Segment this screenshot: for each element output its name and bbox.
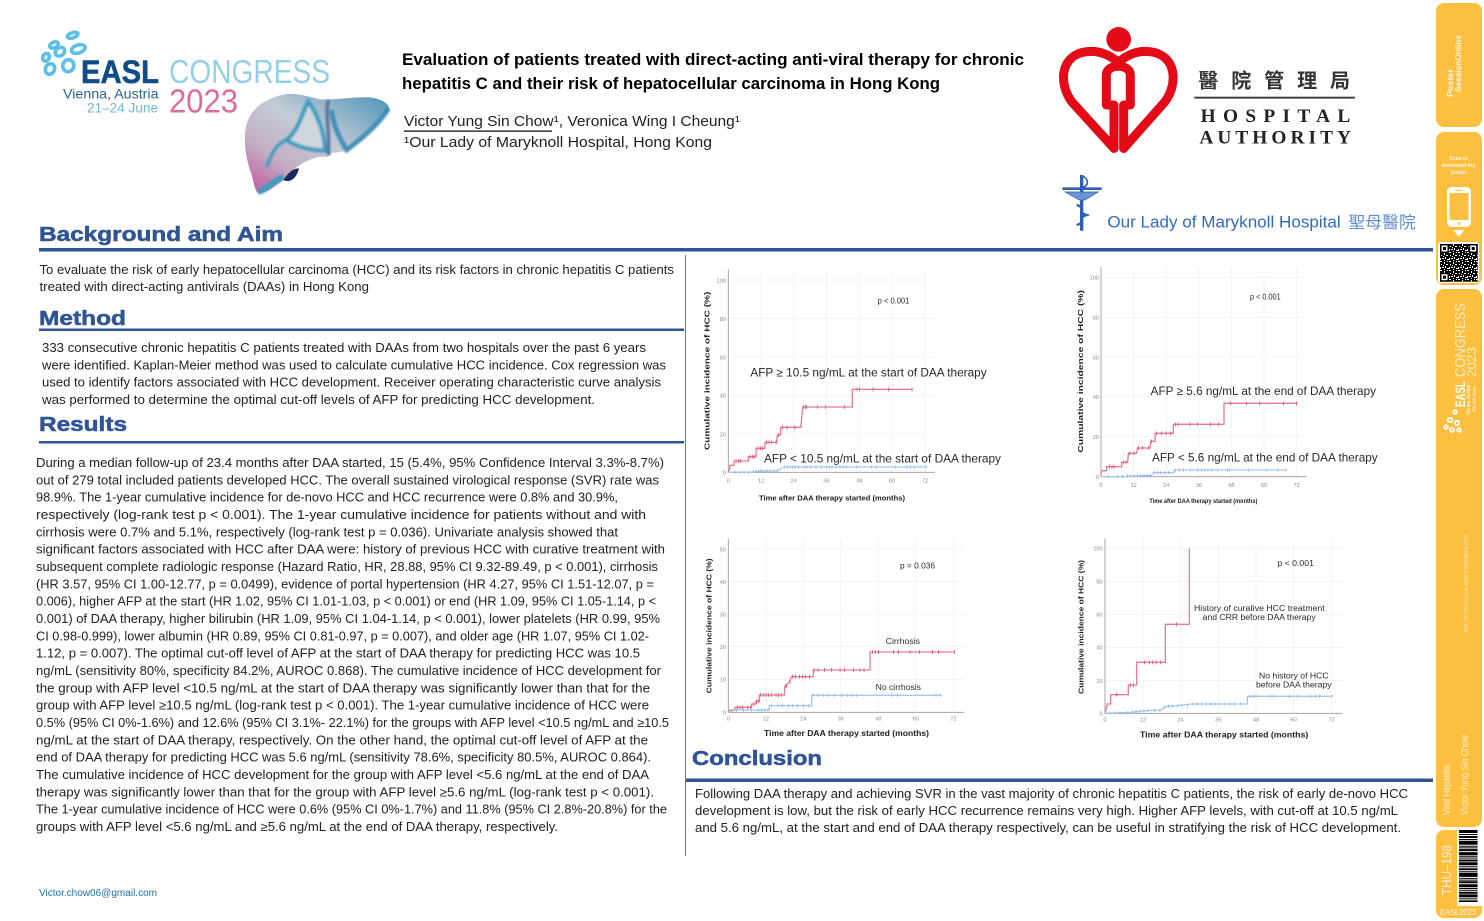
text: results: end of DAA therapy for predicting HCC was 5.6 ng/mL (sensitivity 78.6%, specificity 80.5%, AUROC 0.864). xyxy=(36,751,651,765)
text: results: ng/mL (sensitivity 80%, specificity 84.2%, AUROC 0.868). The cumulative incidence of HCC development for xyxy=(36,664,661,678)
title: Evaluation of patients treated with direct-acting anti-viral therapy for chronic xyxy=(402,51,1024,69)
y axis title: Cumulative incidence of HCC (%) xyxy=(1077,560,1086,694)
chart: cirrhosis: 30 xyxy=(720,612,726,618)
chart: AFP at the start of DAA therapy: 0 xyxy=(723,471,726,477)
chart: history of curative HCC treatment: 48 xyxy=(1253,718,1259,724)
text: results: the group with AFP level <10.5 ng/mL at the start of DAA therapy was significantly lower than that for the xyxy=(36,681,650,695)
chart: cirrhosis: 0 xyxy=(723,711,726,717)
rotated EASL congress logo xyxy=(1444,303,1479,432)
DOI: DOI: 10.3252/pson.eu.EASLCONGRESS.2023 xyxy=(1464,535,1470,632)
rotated EASL congress logo: 2023 xyxy=(1464,347,1479,377)
chart: cirrhosis: 10 xyxy=(720,678,726,684)
p value: p < 0.001 xyxy=(878,296,910,305)
y axis title: Cumulative incidence of HCC (%) xyxy=(703,291,712,450)
text: aim: treated with direct-acting antivirals (DAAs) in Hong Kong xyxy=(40,280,369,294)
chart: history of curative HCC treatment: 20 xyxy=(1096,679,1103,685)
chart: cirrhosis: 60 xyxy=(913,717,919,723)
icon: down arrow xyxy=(1453,230,1464,237)
sidebar: poster number and barcode xyxy=(1436,830,1482,918)
curve: low AFP xyxy=(728,467,927,472)
rotated EASL congress logo: CONGRESS xyxy=(1452,303,1469,377)
chart: AFP at the end of DAA therapy: 20 xyxy=(1093,435,1099,441)
text: conclusion: development is low, but the risk of early HCC recurrence remains very high. Higher AFP levels, with cut-off at 10.5 ng/mL xyxy=(695,804,1398,818)
annotation: cirrhosis: Cirrhosis xyxy=(886,637,920,646)
annotation: chart 1 labels xyxy=(750,296,1001,466)
poster number: THU–198 xyxy=(1439,845,1454,895)
chart: cirrhosis: 12 xyxy=(763,717,769,723)
curve: cirrhosis xyxy=(728,652,954,712)
annotation: high AFP: AFP ≥ 10.5 ng/mL at the start of DAA therapy xyxy=(750,367,987,380)
chart: cirrhosis: 0 xyxy=(727,717,730,723)
chart: history of curative HCC treatment: 60 xyxy=(1291,718,1297,724)
curve: low AFP xyxy=(1101,470,1286,477)
CONGRESS wordmark: CONGRESS xyxy=(169,53,330,90)
annotation: no history of HCC xyxy=(1256,671,1332,689)
panel: conclusion xyxy=(686,747,1433,835)
chart: AFP at the end of DAA therapy: 72 xyxy=(1294,483,1300,489)
chart: AFP at the start of DAA therapy: 0 xyxy=(727,478,730,484)
chart: cirrhosis: 24 xyxy=(800,717,806,723)
chart: AFP at the start of DAA therapy: 36 xyxy=(823,478,829,484)
text: results xyxy=(36,456,669,834)
x axis title: Time after DAA therapy started (months) xyxy=(764,729,929,738)
text: results: therapy was significantly lower than that for the group with AFP level ≥5.6 ng/mL (log-rank test p < 0.001). xyxy=(36,785,654,799)
chart: AFP at the start of DAA therapy: 60 xyxy=(720,355,726,361)
heading: background and aim: Background and Aim xyxy=(39,223,283,246)
icon: caduceus xyxy=(1062,175,1102,231)
chart: history of curative HCC treatment: 24 xyxy=(1178,718,1184,724)
chart: cirrhosis: 48 xyxy=(875,717,881,723)
annotation: chart 4 labels xyxy=(1194,559,1332,689)
chart: AFP at the end of DAA therapy xyxy=(1076,267,1306,505)
logo: Hospital Authority xyxy=(1064,27,1355,149)
text: aim: To evaluate the risk of early hepatocellular carcinoma (HCC) and its risk factors in chronic hepatitis C patients xyxy=(40,263,674,277)
text: method: was performed to determine the optimal cut-off levels of AFP for predicting HCC development. xyxy=(41,393,595,407)
rotated EASL congress logo: EASL xyxy=(1452,381,1468,407)
chart: AFP at the end of DAA therapy: 60 xyxy=(1093,355,1099,361)
logo: EASL Congress 2023 xyxy=(41,31,389,193)
logo: Hospital Authority: AUTHORITY xyxy=(1199,128,1351,149)
QR code xyxy=(1438,242,1479,283)
icon: red heart and person xyxy=(1064,27,1173,148)
text: results: cirrhosis were 0.7% and 5.1%, respectively (log-rank test p = 0.036). Univariate analysis showed that xyxy=(36,525,619,539)
text: aim xyxy=(40,263,674,294)
text: results: 0.5% (95% CI 0%-1.6%) and 12.6% (95% CI 3.1%- 22.1%) for the groups with AFP level <10.5 ng/mL and ≥10.5 xyxy=(36,716,669,730)
panel: results xyxy=(36,413,684,834)
text: method: were identified. Kaplan-Meier method was used to calculate cumulative HCC incidence. Cox regression was xyxy=(41,358,666,372)
chart: history of curative HCC treatment: 100 xyxy=(1093,547,1103,553)
chart: AFP at the start of DAA therapy: 24 xyxy=(791,478,797,484)
text: results: out of 279 total included patients developed HCC. The overall sustained virological response (SVR) rate was xyxy=(36,473,659,487)
title: hepatitis C and their risk of hepatocellular carcinoma in Hong Kong xyxy=(402,75,940,93)
annotation: chart 3 labels xyxy=(876,561,936,692)
sidebar: scan to download xyxy=(1436,132,1482,285)
annotation: low AFP: AFP < 5.6 ng/mL at the end of DAA therapy xyxy=(1152,452,1378,465)
location: Vienna, Austria xyxy=(63,86,159,102)
p value: p < 0.001 xyxy=(1250,292,1281,301)
y axis title: Cumulative incidence of HCC (%) xyxy=(1076,289,1085,453)
Chinese name: 醫院管理局 xyxy=(1198,64,1350,93)
chart: AFP at the start of DAA therapy: 60 xyxy=(889,478,895,484)
text: results: subsequent complete radiologic response (Hazard Ratio, HR, 28.88, 95% CI 9.32-89.49, p < 0.001), cirrhosis xyxy=(36,560,658,574)
p value: p < 0.001 xyxy=(1277,559,1315,568)
annotation: history of HCC xyxy=(1194,604,1326,622)
topic: Viral Hepatitis xyxy=(1442,765,1453,815)
presenter: Victor Yung Sin Chow xyxy=(1460,734,1471,815)
scan caption: Scan to xyxy=(1449,156,1468,162)
dates: 21–24 June xyxy=(87,100,158,116)
annotation: chart 2 labels xyxy=(1151,292,1378,465)
title xyxy=(402,51,1024,93)
scan caption: poster xyxy=(1451,170,1466,176)
text: method xyxy=(41,341,666,407)
chart: cirrhosis xyxy=(704,538,964,738)
chart: history of curative HCC treatment: 60 xyxy=(1096,613,1103,619)
annotation: no history of HCC: before DAA therapy xyxy=(1256,680,1332,689)
contact email: Victor.chow06@gmail.com xyxy=(39,888,157,899)
chart: history of curative HCC treatment: 0 xyxy=(1103,718,1107,724)
text: results: groups with AFP level <5.6 ng/mL and ≥5.6 ng/mL at the end of DAA therapy, respectively. xyxy=(36,820,558,834)
chart: AFP at the end of DAA therapy: 12 xyxy=(1131,483,1137,489)
text: method: 333 consecutive chronic hepatitis C patients treated with DAAs from two hospitals over the past 6 years xyxy=(42,341,646,355)
icon: phone xyxy=(1447,187,1471,227)
authors and affiliation xyxy=(404,114,740,151)
chart: AFP at the end of DAA therapy: 40 xyxy=(1093,395,1099,401)
chart: AFP at the start of DAA therapy: 40 xyxy=(720,394,726,400)
sidebar: congress and session details xyxy=(1436,289,1482,827)
curve: history of HCC xyxy=(1105,548,1189,713)
chart: cirrhosis: 40 xyxy=(720,580,726,586)
chart: cirrhosis: 20 xyxy=(720,645,726,651)
authors and affiliation: Victor Yung Sin Chow¹, Veronica Wing I Cheung¹ xyxy=(404,114,740,130)
EASL wordmark: EASL xyxy=(81,54,159,90)
p value: p = 0.036 xyxy=(900,561,936,570)
logo: Our Lady of Maryknoll Hospital xyxy=(1062,175,1416,233)
heading: conclusion: Conclusion xyxy=(692,747,822,770)
chart: cirrhosis: 50 xyxy=(720,547,726,553)
chart: AFP at the end of DAA therapy: 48 xyxy=(1228,483,1234,489)
chart: AFP at the start of DAA therapy: 48 xyxy=(856,478,862,484)
text: results: The cumulative incidence of HCC development for the group with AFP level <5.6 ng/mL at the end of DAA xyxy=(36,768,650,782)
chart: history of curative HCC treatment: 0 xyxy=(1100,712,1103,718)
chart: AFP at the end of DAA therapy: 36 xyxy=(1196,483,1202,489)
text: conclusion: and 5.6 ng/mL, at the start and end of DAA therapy respectively, can be useful in stratifying the risk of HCC development. xyxy=(695,821,1401,835)
x axis title: Time after DAA therapy started (months) xyxy=(1149,498,1257,505)
authors and affiliation: ¹Our Lady of Maryknoll Hospital, Hong Kong xyxy=(404,135,712,151)
chart: AFP at the end of DAA therapy: 100 xyxy=(1090,276,1099,282)
chart: cirrhosis: 36 xyxy=(838,717,844,723)
brand text: Poster xyxy=(1446,69,1455,97)
text: results: CI 0.98-0.999), lower albumin (HR 0.89, 95% CI 0.81-0.97, p = 0.007), and older age (HR 1.07, 95% CI 1.02- xyxy=(36,629,649,643)
heading: method: Method xyxy=(39,307,126,330)
chart: AFP at the end of DAA therapy: 80 xyxy=(1093,316,1099,322)
heading: results: Results xyxy=(39,413,127,436)
chart: history of curative HCC treatment: 36 xyxy=(1215,718,1221,724)
scan caption xyxy=(1442,156,1475,176)
curve: no cirrhosis xyxy=(728,695,942,712)
chart: cirrhosis: 72 xyxy=(950,717,956,723)
chart: AFP at the end of DAA therapy: 0 xyxy=(1096,475,1099,481)
icon: liver xyxy=(245,94,389,193)
annotation: history of HCC: History of curative HCC treatment xyxy=(1194,604,1326,613)
text: results: 0.001) of DAA therapy, higher bilirubin (HR 1.09, 95% CI 1.04-1.14, p < 0.001), lower platelets (HR 0.99, 95% xyxy=(36,612,660,626)
barcode xyxy=(1459,830,1478,902)
annotation: low AFP: AFP < 10.5 ng/mL at the start of DAA therapy xyxy=(764,453,1001,466)
text: results: (HR 3.57, 95% CI 1.00-12.77, p = 0.0499), evidence of portal hypertension (HR 4.27, 95% CI 1.51-12.07, p = xyxy=(36,577,654,591)
x axis title: Time after DAA therapy started (months) xyxy=(1140,730,1309,739)
icon: EASL hexagon cluster xyxy=(41,31,86,76)
chart: AFP at the end of DAA therapy: 60 xyxy=(1261,483,1267,489)
chart: AFP at the end of DAA therapy: 0 xyxy=(1099,483,1103,489)
text: results: respectively (log-rank test p < 0.001). The 1-year cumulative incidence for patients without and with xyxy=(36,508,646,522)
text: results: group with AFP level ≥10.5 ng/mL (log-rank test p < 0.001). The 1-year cumulative incidence of HCC were xyxy=(36,699,649,713)
x axis title: Time after DAA therapy started (months) xyxy=(759,494,905,503)
hospital name: Our Lady of Maryknoll Hospital xyxy=(1107,213,1341,231)
rotated EASL congress logo: Vienna, Austria xyxy=(1466,384,1472,415)
annotation: no cirrhosis: No cirrhosis xyxy=(876,683,921,692)
y axis title: Cumulative incidence of HCC (%) xyxy=(704,558,713,693)
text: results: 0.006), higher AFP at the start (HR 1.02, 95% CI 1.01-1.03, p < 0.001) or end (HR 1.09, 95% CI 1.05-1.14, p < xyxy=(36,595,656,609)
text: results: The 1-year cumulative incidence of HCC were 0.6% (95% CI 0%-1.7%) and 11.8% (95% CI 2.8%-20.8%) for the xyxy=(36,803,667,817)
chart: AFP at the start of DAA therapy: 12 xyxy=(758,478,764,484)
curve: high AFP xyxy=(1101,403,1297,477)
annotation: history of HCC: and CRR before DAA therapy xyxy=(1203,613,1316,622)
text: conclusion: Following DAA therapy and achieving SVR in the vast majority of chronic hepatitis C patients, the risk of early de-novo HCC xyxy=(695,787,1408,801)
chart: history of curative HCC treatment: 80 xyxy=(1096,580,1103,586)
text: results: ng/mL at the start of DAA therapy, respectively. On the other hand, the optimal cut-off level of AFP at the xyxy=(36,733,648,747)
curve: high AFP xyxy=(728,389,913,472)
sidebar: poster session online xyxy=(1436,3,1482,127)
chart: history of curative HCC treatment xyxy=(1077,538,1343,739)
year: 2023 xyxy=(169,82,238,120)
chart: AFP at the start of DAA therapy: 100 xyxy=(717,278,726,284)
chart: history of curative HCC treatment: 12 xyxy=(1140,718,1146,724)
rotated EASL congress logo: 21–24 June xyxy=(1472,386,1478,412)
brand text xyxy=(1446,34,1463,97)
chart: history of curative HCC treatment: 72 xyxy=(1329,718,1335,724)
text: results: During a median follow-up of 23.4 months after DAA started, 15 (5.4%, 95% Confidence Interval 3.3%-8.7%) xyxy=(36,456,664,470)
chart: AFP at the end of DAA therapy: 24 xyxy=(1163,483,1169,489)
chart: AFP at the start of DAA therapy: 20 xyxy=(720,432,726,438)
panel: background and aim xyxy=(39,223,1433,294)
text: results: significant factors associated with HCC after DAA were: history of previous HCC with curative treatment with xyxy=(36,543,665,557)
congress tag: EASL2023 xyxy=(1440,907,1476,917)
annotation: no history of HCC: No history of HCC xyxy=(1259,671,1329,680)
English name: HOSPITAL xyxy=(1201,106,1350,127)
curve: no history of HCC xyxy=(1105,696,1333,713)
chart: AFP at the start of DAA therapy: 80 xyxy=(720,317,726,323)
text: method: used to identify factors associated with HCC development. Receiver operating characteristic curve analysis xyxy=(42,376,661,390)
chart: history of curative HCC treatment: 40 xyxy=(1096,646,1103,652)
text: results: 1.12, p = 0.007). The optimal cut-off level of AFP at the start of DAA therapy for predicting HCC was 10.5 xyxy=(36,647,640,661)
chart: AFP at the start of DAA therapy xyxy=(703,269,935,503)
logo: Our Lady of Maryknoll Hospital: 聖母醫院 xyxy=(1348,209,1416,233)
text: results: 98.9%. The 1-year cumulative incidence for de-novo HCC and HCC recurrence were 0.8% and 30.9%, xyxy=(36,491,618,505)
panel: method xyxy=(39,307,684,407)
text: conclusion xyxy=(695,787,1408,835)
annotation: high AFP: AFP ≥ 5.6 ng/mL at the end of DAA therapy xyxy=(1151,385,1376,398)
brand text: SessionOnline xyxy=(1454,34,1463,92)
chart: AFP at the start of DAA therapy: 72 xyxy=(922,478,928,484)
scan caption: download the xyxy=(1442,163,1475,169)
